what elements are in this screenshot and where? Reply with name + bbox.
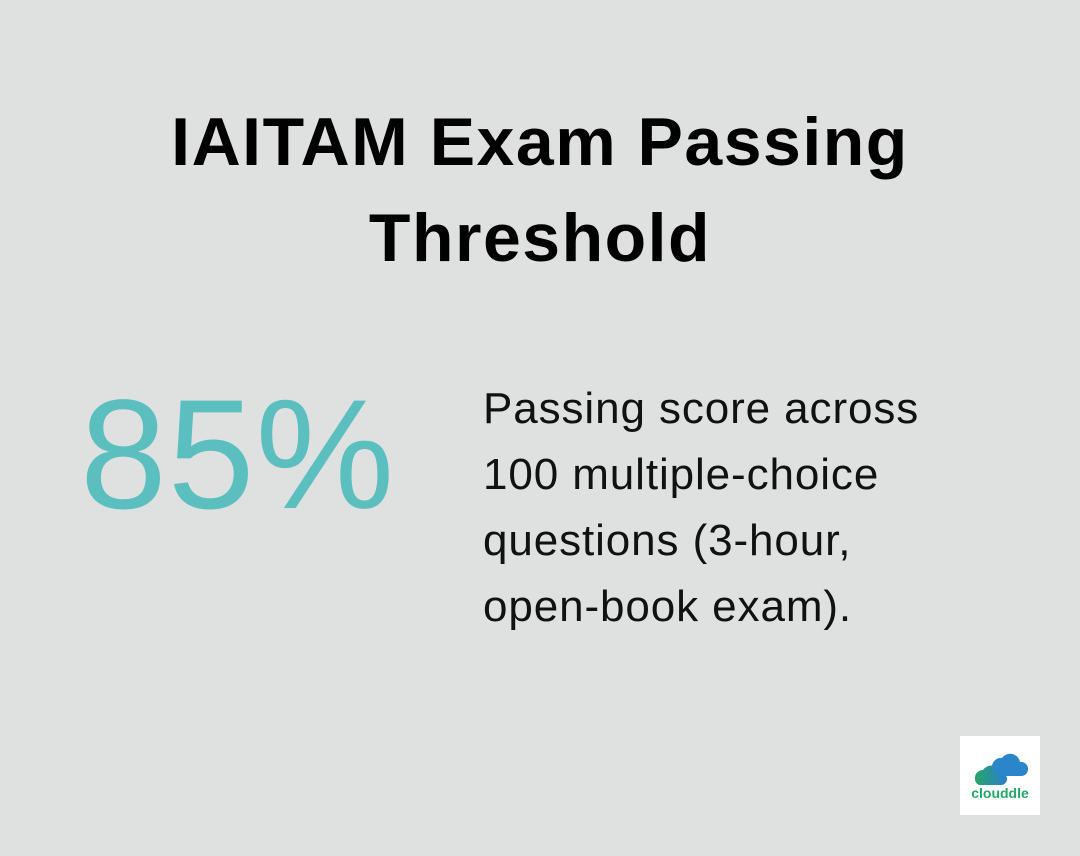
description text: questions (3-hour,: [483, 516, 851, 565]
title: Threshold: [369, 200, 711, 276]
description text: open-book exam).: [483, 582, 852, 631]
title: IAITAM Exam Passing: [171, 104, 909, 180]
title: [171, 104, 909, 276]
logo: clouddle: [960, 736, 1040, 815]
description text: [483, 384, 919, 631]
description text: Passing score across: [483, 384, 919, 433]
big stat: 85%: 85%: [80, 368, 395, 542]
logo: clouddle: clouddle: [971, 785, 1029, 801]
description text: 100 multiple-choice: [483, 450, 879, 499]
